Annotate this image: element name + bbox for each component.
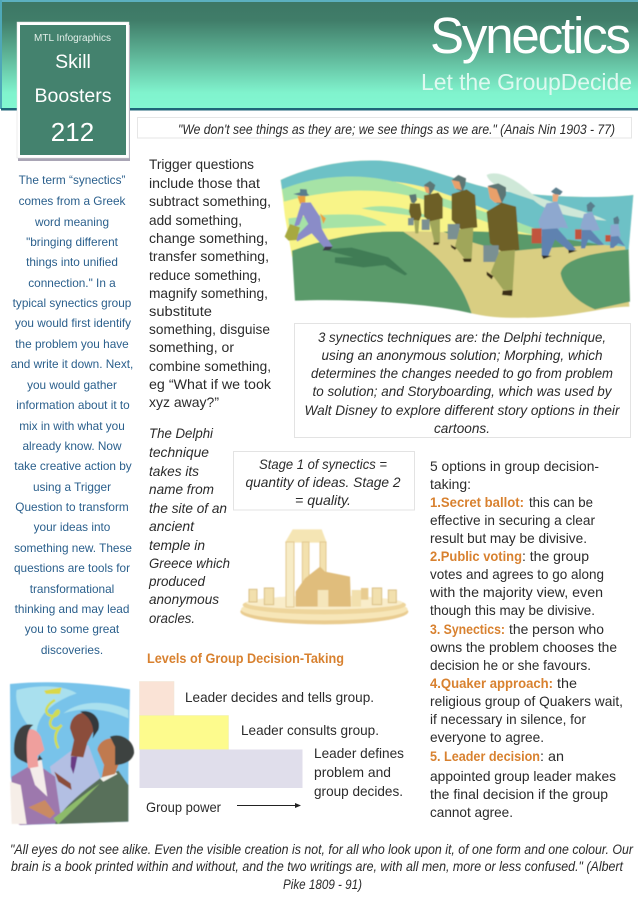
- text: 5 options in group decision-taking: 5 options in group decision-: [430, 458, 599, 474]
- title: Synectics: [430, 7, 631, 64]
- text: the Delphi technique: technique: [149, 444, 209, 460]
- text: trigger questions: add something,: [149, 212, 242, 228]
- text: trigger questions: change something,: [149, 230, 268, 246]
- text: trigger questions: xyz away?”: [149, 394, 219, 410]
- text: trigger questions: something, disguise: [149, 321, 270, 337]
- left column text: term synectics: mix in with what you: [19, 419, 125, 433]
- badge: Skill Boosters 212: MTL Infographics: [34, 33, 111, 44]
- box: 3 synectics techniques: using an anonymous solution; Morphing, which: [322, 347, 603, 363]
- box: 3 synectics techniques: cartoons.: [434, 420, 490, 436]
- text: 5 options in group decision-taking: 3. Synectics:: [430, 621, 505, 637]
- box: 3 synectics techniques: Walt Disney to explore different story options in their: [304, 402, 621, 418]
- text: trigger questions: include those that: [149, 175, 260, 191]
- text: 5 options in group decision-taking: taking:: [430, 476, 471, 492]
- chart: levels of group power staircase: [140, 682, 404, 815]
- text: trigger questions: eg “What if we took: [149, 376, 272, 392]
- left column text: term synectics: typical synectics group: [13, 296, 132, 310]
- left column text: term synectics: take creative action by: [14, 459, 132, 473]
- subtitle: Let the GroupDecide: [421, 69, 632, 95]
- first walker: [285, 189, 333, 251]
- left column text: term synectics: and write it down. Next,: [11, 357, 133, 371]
- ground: [403, 231, 629, 318]
- brown figures: [408, 175, 519, 296]
- text: the Delphi technique: temple in: [149, 537, 205, 553]
- text: 5 options in group decision-taking: decision he or she favours.: [430, 657, 591, 673]
- left column text: term synectics: the problem you have: [15, 337, 129, 351]
- text: the Delphi technique: the site of an: [149, 500, 227, 516]
- text: 5 options in group decision-taking: the final decision if the group: [430, 786, 608, 802]
- chart labels: Leader decides and tells group.: [185, 689, 374, 705]
- text: trigger questions: magnify something,: [149, 285, 268, 301]
- text: 5 options in group decision-taking: votes and agrees to go along: [430, 566, 604, 582]
- badge: Skill Boosters 212: Boosters: [35, 85, 112, 107]
- left column text: term synectics: thinking and may lead: [15, 602, 129, 616]
- quote: Albert Pike: Pike 1809 - 91): [283, 876, 362, 892]
- text: 5 options in group decision-taking: effective in securing a clear: [430, 512, 595, 528]
- text: 5 options in group decision-taking: the: [557, 675, 577, 691]
- text: the Delphi technique: ancient: [149, 518, 195, 534]
- header banner: [0, 0, 638, 110]
- text: 5 options in group decision-taking: cannot agree.: [430, 804, 513, 820]
- left column text: term synectics: you would first identify: [15, 316, 131, 330]
- bar: leader decides: [140, 682, 174, 716]
- illustration: Delphi temple: [240, 529, 408, 624]
- badge: Skill Boosters 212: Skill: [55, 51, 91, 73]
- left column text: term synectics: already know. Now: [22, 439, 122, 453]
- text: 5 options in group decision-taking: the person who: [509, 621, 604, 637]
- quote: Albert Pike: [10, 841, 634, 892]
- text: 5 options in group decision-taking: : the group: [522, 548, 589, 564]
- box: stage 1 and 2: Stage 1 of synectics =: [259, 456, 387, 472]
- text: the Delphi technique: produced: [148, 573, 206, 589]
- text: 5 options in group decision-taking: : an: [540, 748, 564, 764]
- text: 5 options in group decision-taking: result but may be divisive.: [430, 530, 587, 546]
- chart labels: Group power: [146, 799, 221, 815]
- box: 3 synectics techniques: 3 synectics techniques are: the Delphi technique,: [318, 329, 606, 345]
- text: 5 options in group decision-taking: [429, 458, 623, 820]
- text: 5 options in group decision-taking: 1.Secret ballot:: [430, 494, 524, 510]
- chart labels: group decides.: [314, 783, 403, 799]
- left column text: term synectics: [11, 173, 133, 657]
- left column text: term synectics: discoveries.: [41, 643, 103, 657]
- left column text: term synectics: things into unified: [26, 255, 118, 269]
- left column text: term synectics: word meaning: [34, 215, 109, 229]
- heading: levels of group decision-taking: Levels of Group Decision-Taking: [147, 651, 344, 666]
- chart labels: problem and: [314, 764, 391, 780]
- text: the Delphi technique: oracles.: [149, 610, 195, 626]
- left column text: term synectics: comes from a Greek: [19, 194, 126, 208]
- box: 3 synectics techniques: [294, 324, 630, 438]
- text: 5 options in group decision-taking: religious group of Quakers wait,: [430, 693, 623, 709]
- text: trigger questions: subtract something,: [149, 193, 271, 209]
- text: trigger questions: Trigger questions: [149, 156, 254, 172]
- text: 5 options in group decision-taking: with the majority view, even: [429, 584, 603, 600]
- bar: leader defines: [140, 750, 302, 788]
- chart labels: [146, 689, 404, 815]
- text: 5 options in group decision-taking: 5. Leader decision: [430, 748, 540, 764]
- left column text: term synectics: questions are tools for: [14, 561, 130, 575]
- text: 5 options in group decision-taking: 2.Public voting: [430, 548, 522, 564]
- left column text: term synectics: information about it to: [16, 398, 130, 412]
- text: the Delphi technique: Greece which: [149, 555, 230, 571]
- text: trigger questions: [149, 156, 272, 410]
- text: 5 options in group decision-taking: appointed group leader makes: [430, 768, 616, 784]
- blue figures: [532, 187, 625, 259]
- left column text: term synectics: Question to transform: [15, 500, 129, 514]
- text: the Delphi technique: takes its: [149, 463, 199, 479]
- left column text: term synectics: The term “synectics”: [19, 173, 125, 187]
- sky: [281, 160, 633, 257]
- badge: Skill Boosters 212: 212: [51, 117, 94, 147]
- left column text: term synectics: transformational: [30, 582, 114, 596]
- left column text: term synectics: something new. These: [14, 541, 132, 555]
- text: the Delphi technique: name from: [149, 481, 214, 497]
- box: 3 synectics techniques: to solution; and Storyboarding, which was used by: [312, 383, 612, 399]
- text: the Delphi technique: anonymous: [149, 591, 219, 607]
- text: trigger questions: combine something,: [149, 358, 271, 374]
- text: 5 options in group decision-taking: everyone to agree.: [430, 729, 544, 745]
- chart labels: Leader consults group.: [241, 722, 379, 738]
- arrow: group power: [237, 803, 301, 808]
- text: trigger questions: reduce something,: [149, 267, 261, 283]
- illustration: people walking across a hill: [281, 160, 633, 318]
- text: 5 options in group decision-taking: though this may be divisive.: [430, 602, 595, 618]
- left column text: term synectics: "bringing different: [26, 235, 119, 249]
- left column text: term synectics: using a Trigger: [33, 480, 111, 494]
- text: trigger questions: transfer something,: [149, 248, 269, 264]
- text: the Delphi technique: [148, 425, 230, 626]
- text: 5 options in group decision-taking: this can be: [529, 494, 593, 510]
- badge: Skill Boosters 212: [17, 22, 130, 161]
- text: trigger questions: something, or: [149, 339, 234, 355]
- text: 5 options in group decision-taking: owns the problem chooses the: [430, 639, 617, 655]
- text: the Delphi technique: The Delphi: [149, 425, 214, 441]
- box: stage 1 and 2: = quality.: [295, 492, 351, 508]
- box: 3 synectics techniques: determines the changes needed to go from problem: [311, 365, 613, 381]
- box: stage 1 and 2: [234, 452, 414, 510]
- illustration: three people looking up: [10, 682, 134, 825]
- text: trigger questions: substitute: [149, 303, 212, 319]
- left column text: term synectics: connection." In a: [28, 276, 116, 290]
- left column text: term synectics: your ideas into: [34, 520, 111, 534]
- text: 5 options in group decision-taking: if necessary in silence, for: [430, 711, 586, 727]
- chart labels: Leader defines: [314, 745, 404, 761]
- text: 5 options in group decision-taking: 4.Quaker approach:: [430, 675, 553, 691]
- box: stage 1 and 2: quantity of ideas. Stage 2: [246, 474, 401, 490]
- left column text: term synectics: you to some great: [25, 622, 120, 636]
- bar: leader consults: [140, 716, 228, 750]
- left column text: term synectics: you would gather: [27, 378, 117, 392]
